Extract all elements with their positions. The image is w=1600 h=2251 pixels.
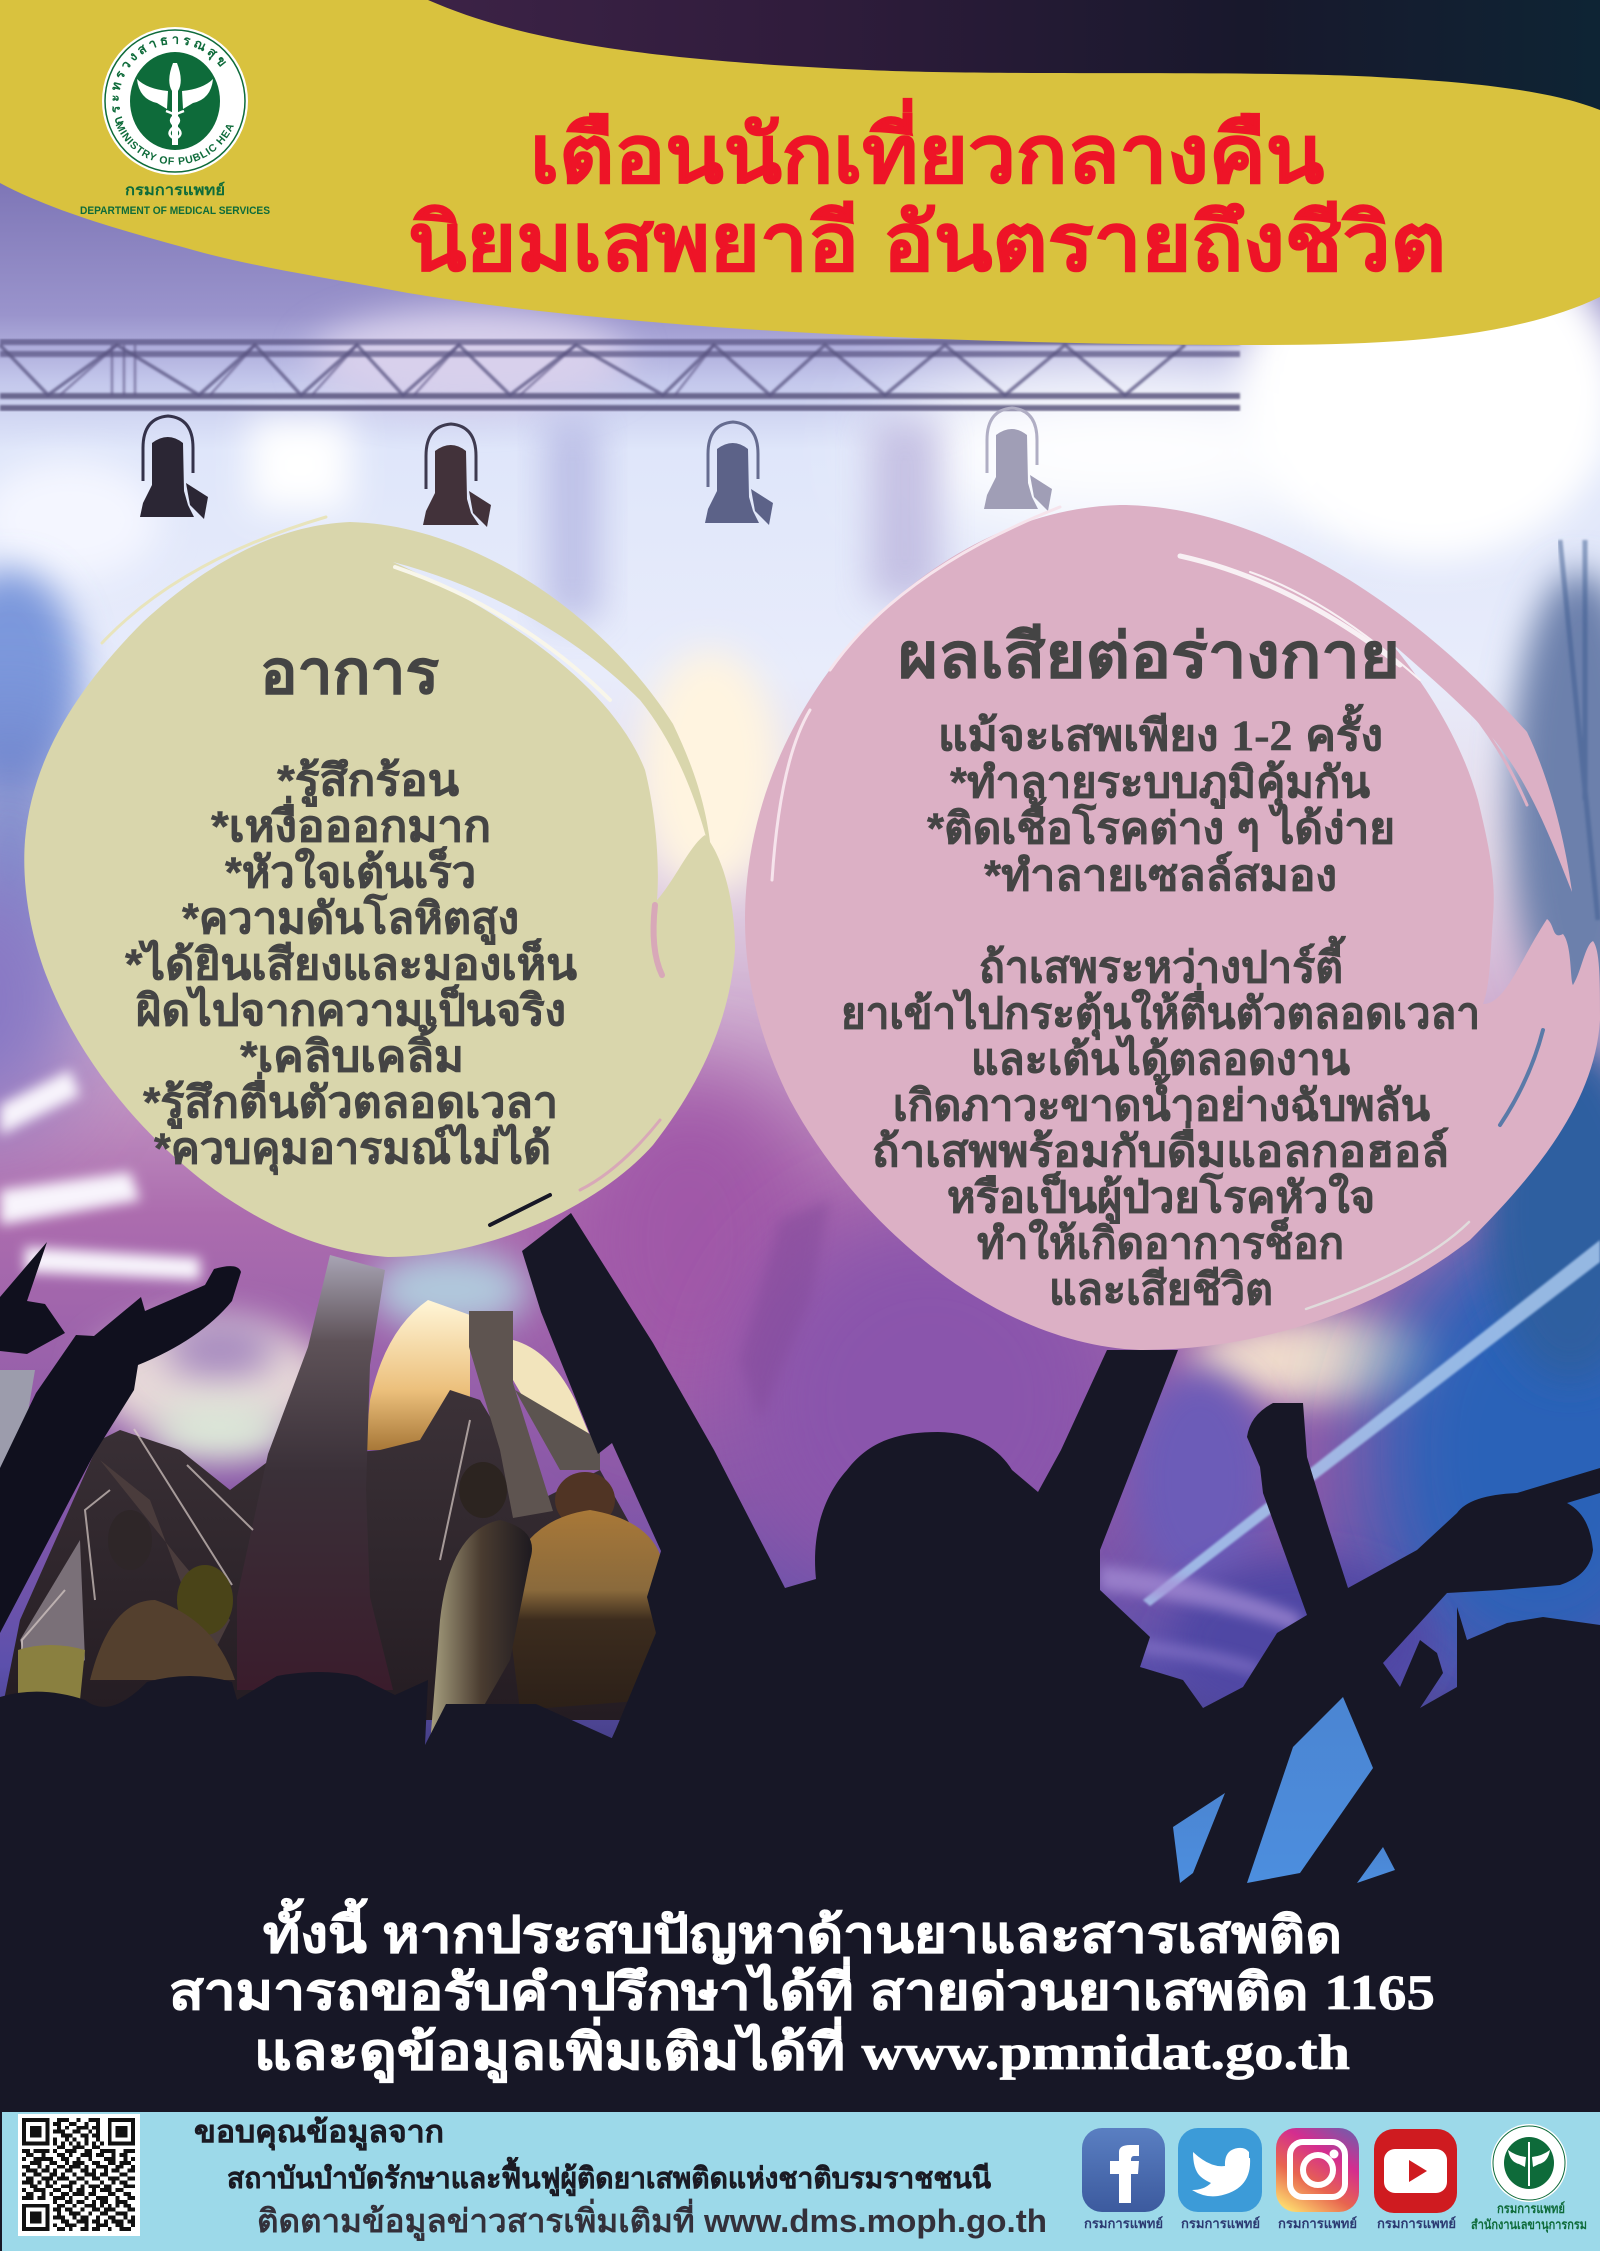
crowd silhouettes: [0, 1213, 1600, 2115]
symptom list: ผิดไปจากความเป็นจริง: [136, 984, 566, 1035]
effects text: *ทำลายเซลล์สมอง: [984, 851, 1337, 900]
icon captions: [1084, 2216, 1456, 2231]
symptom list: [125, 757, 578, 1176]
warm crowd area: [0, 1250, 700, 1745]
title text: [408, 98, 1446, 287]
footer department text: [1471, 2201, 1587, 2233]
icon: instagram: [1276, 2128, 1359, 2212]
icon captions: กรมการแพทย์: [1084, 2216, 1163, 2231]
dark crowd bodies: [0, 1390, 700, 1720]
raised hand far left: [0, 1242, 65, 1354]
thanks text: ติดตามข้อมูลข่าวสารเพิ่มเติมที่ www.dms.moph.go.th: [257, 2198, 1047, 2242]
helpline message: ทั้งนี้ หากประสบปัญหาด้านยาและสารเสพติด: [263, 1898, 1342, 1964]
main dark crowd: [0, 1213, 1600, 2115]
seal: [102, 27, 248, 175]
light 1: [140, 416, 208, 519]
blue gaps between arms: [1173, 1697, 1395, 1883]
icon captions: กรมการแพทย์: [1278, 2216, 1357, 2231]
icon captions: กรมการแพทย์: [1181, 2216, 1260, 2231]
effects text: และเสียชีวิต: [1049, 1266, 1273, 1314]
symptom list: *หัวใจเต้นเร็ว: [225, 846, 476, 897]
icon: youtube: [1374, 2129, 1457, 2213]
effects text: [841, 703, 1480, 1314]
effects text: ทำให้เกิดอาการช็อก: [977, 1217, 1344, 1268]
helpline message: [169, 1898, 1435, 2083]
effects text: ถ้าเสพพร้อมกับดื่มแอลกอฮอล์: [872, 1121, 1449, 1176]
symptom list: *ได้ยินเสียงและมองเห็น: [125, 938, 578, 989]
effects text: และเต้นได้ตลอดงาน: [971, 1034, 1351, 1084]
helpline message: สามารถขอรับคำปรึกษาได้ที่ สายด่วนยาเสพติด 1165: [169, 1957, 1435, 2020]
panel: body effects circle: [745, 505, 1600, 1350]
brush strokes: [772, 507, 1543, 1309]
light 3: [705, 422, 773, 525]
icon captions: กรมการแพทย์: [1377, 2216, 1456, 2231]
stage truss: [0, 342, 1240, 408]
title banner: [0, 0, 1600, 345]
QR code: [18, 2114, 140, 2236]
ministry logo: [80, 27, 270, 217]
symptom list: *รู้สึกตื่นตัวตลอดเวลา: [143, 1072, 558, 1129]
heading: อาการ: [260, 639, 439, 706]
icon: twitter: [1178, 2128, 1262, 2212]
light 4: [984, 408, 1052, 511]
light 2: [423, 424, 491, 527]
brush strokes: [102, 517, 662, 1225]
title text: นิยมเสพยาอี อันตรายถึงชีวิต: [408, 198, 1446, 287]
thanks text: สถาบันบำบัดรักษาและฟื้นฟูผู้ติดยาเสพติดแห่งชาติบรมราชชนนี: [227, 2156, 991, 2196]
golden arch glow: [365, 1300, 470, 1450]
helpline message: และดูข้อมูลเพิ่มเติมได้ที่ www.pmnidat.go.th: [254, 2017, 1350, 2083]
footer department text: กรมการแพทย์: [1497, 2201, 1565, 2216]
symptom list: *ควบคุมอารมณ์ไม่ได้: [154, 1123, 551, 1176]
people: [459, 1462, 507, 1518]
icon: facebook: [1082, 2128, 1165, 2212]
symptom list: *เคลิบเคลิ้ม: [240, 1024, 464, 1081]
symptom list: *รู้สึกร้อน: [277, 757, 460, 807]
symptom list: *ความดันโลหิตสูง: [182, 892, 519, 945]
effects text: หรือเป็นผู้ป่วยโรคหัวใจ: [947, 1171, 1375, 1224]
raised arm columns: [237, 1255, 393, 1690]
effects text: แม้จะเสพเพียง 1-2 ครั้ง: [938, 703, 1383, 760]
effects text: ยาเข้าไปกระตุ้นให้ตื่นตัวตลอดเวลา: [841, 983, 1480, 1041]
effects text: ถ้าเสพระหว่างปาร์ตี้: [979, 935, 1346, 992]
footer bar: [2, 2112, 1600, 2251]
thanks text: ขอบคุณข้อมูลจาก: [194, 2116, 444, 2151]
title text: เตือนนักเที่ยวกลางคืน: [530, 98, 1324, 199]
seal: กระทรวงสาธารณสุข: [112, 36, 226, 124]
raised arm left: [0, 1266, 241, 1633]
heading: ผลเสียต่อร่างกาย: [898, 622, 1400, 691]
effects text: เกิดภาวะขาดน้ำอย่างฉับพลัน: [893, 1073, 1431, 1130]
effects text: *ทำลายระบบภูมิคุ้มกัน: [950, 759, 1371, 810]
panel: symptoms circle: [24, 517, 735, 1257]
department name: กรมการแพทย์: [125, 181, 225, 199]
arm highlights: [22, 1420, 470, 1690]
symptom list: *เหงื่อออกมาก: [211, 796, 491, 851]
seal: MINISTRY OF PUBLIC HEALTH: [116, 122, 234, 165]
thanks text: [194, 2116, 1047, 2242]
stage lights: [140, 408, 1052, 527]
ministry logo: DEPARTMENT OF MEDICAL SERVICES: [80, 205, 270, 217]
footer seal: [1491, 2124, 1567, 2202]
effects text: *ติดเชื้อโรคต่าง ๆ ได้ง่าย: [927, 796, 1395, 853]
